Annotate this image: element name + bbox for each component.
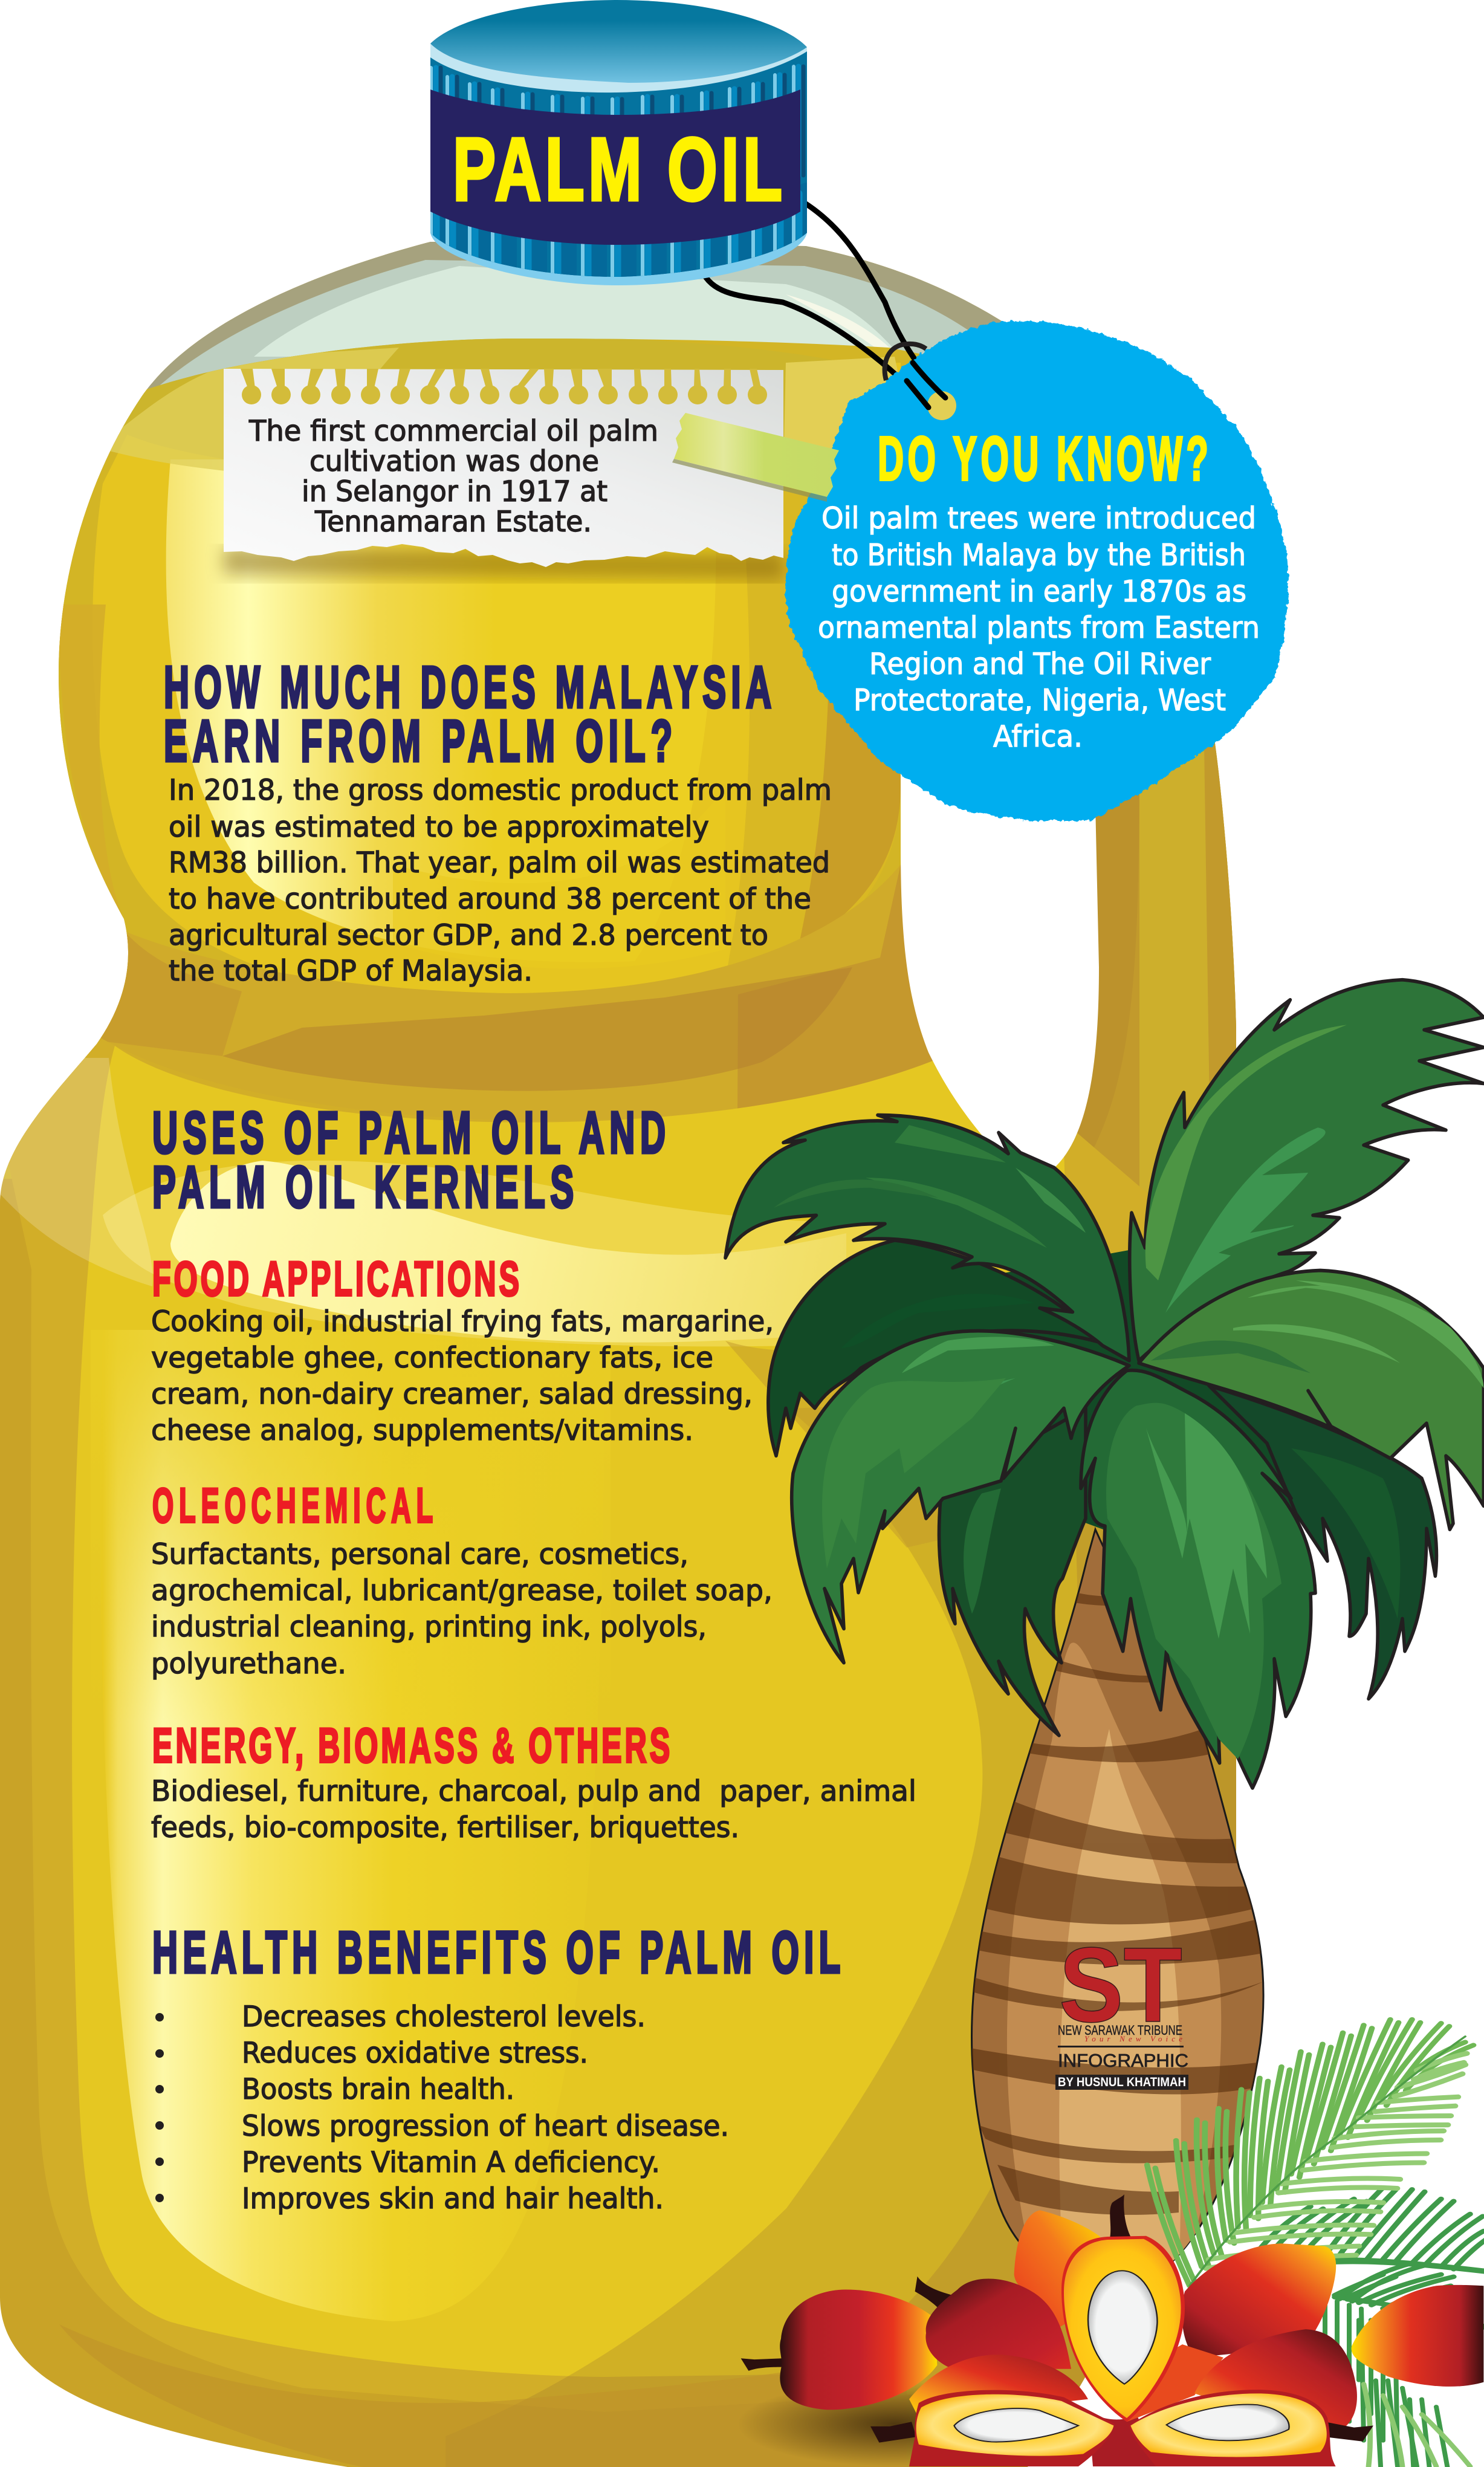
benefits list: Boosts brain health. <box>242 2073 514 2106</box>
earnings paragraph: In 2018, the gross domestic product from palm <box>169 774 832 807</box>
note text <box>248 415 658 539</box>
infographic label: INFOGRAPHIC <box>1058 2050 1188 2071</box>
string ends over hole <box>907 363 945 407</box>
bottle silhouette <box>0 242 1236 2467</box>
fern: lower leaflets <box>1206 2054 1466 2268</box>
frond: centre front <box>1081 1370 1315 1788</box>
frond highlight: back right <box>1291 1448 1400 1619</box>
strings to tag <box>702 203 945 407</box>
fruit: bottom left half <box>870 2390 1115 2466</box>
note line 1: The first commercial oil palm <box>248 415 658 448</box>
frond: back left dark <box>768 1240 1103 1456</box>
did you know tag <box>785 321 1288 821</box>
fern: main stem <box>1190 2037 1465 2286</box>
upper pale highlight <box>166 459 716 962</box>
byline box <box>1055 2075 1188 2090</box>
tagline: Your New Voice <box>1084 2034 1182 2043</box>
cap top <box>430 0 807 83</box>
earnings heading: HOW MUCH DOES MALAYSIA <box>164 655 771 720</box>
fruit: right lower <box>1194 2329 1357 2433</box>
tag heading: DO YOU KNOW? <box>878 424 1208 493</box>
fruit: left whole with stem <box>741 2290 937 2410</box>
benefits list: Improves skin and hair health. <box>242 2182 664 2216</box>
energy text: Biodiesel, furniture, charcoal, pulp and paper, animal <box>151 1775 916 1808</box>
ST letters: ST <box>1059 1926 1182 2044</box>
string loop <box>885 344 926 380</box>
frond: back right dark <box>1209 1386 1436 1699</box>
section: earnings <box>164 655 832 988</box>
fern: lower right light <box>1364 2384 1470 2466</box>
newspaper logo <box>1055 1926 1188 2090</box>
fern: lower right dark <box>1325 2301 1451 2467</box>
shoulder pale highlight <box>103 1161 967 1346</box>
palm fruit cluster <box>741 2194 1483 2466</box>
fruit: right large <box>1182 2243 1336 2358</box>
benefits list: Slows progression of heart disease. <box>242 2110 729 2143</box>
shoulder glass sheen <box>0 1058 153 1286</box>
food applications text: vegetable ghee, confectionary fats, ice <box>151 1341 713 1375</box>
frond: back lower left <box>939 1409 1086 1736</box>
palm crown <box>725 980 1483 1788</box>
oil upper fill <box>0 302 1269 1179</box>
bullets <box>155 2013 164 2202</box>
bottle <box>0 242 1269 2467</box>
left side stripes <box>59 605 124 919</box>
benefits list: Decreases cholesterol levels. <box>242 2000 646 2034</box>
fruit shadow <box>737 2382 1052 2466</box>
handle hole <box>901 695 1099 1185</box>
logo rule <box>1058 2046 1184 2047</box>
note line 4: Tennamaran Estate. <box>314 505 592 539</box>
uses heading: USES OF PALM OIL AND <box>152 1100 666 1165</box>
upper body main <box>92 363 901 998</box>
fruit: bottom centre red <box>1088 2411 1161 2466</box>
frond: right front <box>1139 1271 1483 1529</box>
lower vertical highlight <box>100 1330 604 2321</box>
oil surface lens <box>97 337 943 479</box>
paper sheet <box>224 369 783 567</box>
blue torn circle <box>785 321 1288 821</box>
oleochemical text <box>151 1538 773 1681</box>
uses heading: PALM OIL KERNELS <box>152 1155 574 1220</box>
section: uses <box>151 1100 916 1844</box>
waist shadow band <box>73 864 979 1209</box>
section: health benefits <box>152 1920 840 2216</box>
energy heading: ENERGY, BIOMASS & OTHERS <box>152 1719 670 1773</box>
energy text: feeds, bio-composite, fertiliser, briquettes. <box>151 1811 739 1844</box>
food applications text <box>151 1305 774 1447</box>
tag line 7: Africa. <box>993 719 1083 754</box>
frond highlights: centre <box>1106 1403 1281 1759</box>
fruit: second whole with stem <box>915 2277 1071 2369</box>
benefits list <box>242 2000 729 2216</box>
bottle cap <box>430 0 807 285</box>
frond: upper left <box>725 1115 1129 1361</box>
title: PALM OIL <box>453 120 782 219</box>
fruit: bottom right half <box>1129 2390 1373 2466</box>
note paper <box>224 369 783 567</box>
binding holes <box>241 369 767 404</box>
health heading: HEALTH BENEFITS OF PALM OIL <box>152 1920 840 1985</box>
frond: left front <box>792 1331 1129 1663</box>
frond highlights: right <box>1151 1280 1483 1388</box>
byline: BY HUSNUL KHATIMAH <box>1058 2075 1186 2089</box>
glass neck and oil body layers <box>0 242 1269 2467</box>
lower body base <box>0 1028 1236 2412</box>
fruit: centre right orange <box>1112 2344 1223 2422</box>
food applications heading: FOOD APPLICATIONS <box>152 1252 519 1306</box>
tag line 5: Region and The Oil River <box>869 647 1211 681</box>
tag line 6: Protectorate, Nigeria, West <box>854 683 1226 718</box>
oleochemical text: Surfactants, personal care, cosmetics, <box>151 1538 689 1571</box>
uses heading <box>152 1100 666 1220</box>
cap ribs <box>431 66 807 284</box>
cap body <box>430 44 807 285</box>
earnings paragraph: oil was estimated to be approximately <box>169 811 709 844</box>
tag line 2: to British Malaya by the British <box>832 538 1246 572</box>
handle bands <box>1064 605 1269 1330</box>
palm trunk <box>967 1529 1266 2297</box>
waist left shade <box>91 931 242 1056</box>
earnings paragraph <box>169 774 832 988</box>
earnings paragraph: the total GDP of Malaysia. <box>169 955 533 988</box>
tag body <box>818 501 1260 754</box>
waist dark lens <box>222 967 852 1091</box>
note paper shadow <box>224 547 786 580</box>
oleochemical text: polyurethane. <box>151 1647 346 1681</box>
fern: main stem leaflets <box>1147 2020 1474 2289</box>
frond: upper right <box>1130 980 1483 1361</box>
fruit: centre half <box>1061 2194 1185 2422</box>
waist right shade <box>737 864 961 1112</box>
food applications text: cream, non-dairy creamer, salad dressing, <box>151 1378 753 1411</box>
note line 2: cultivation was done <box>309 445 599 478</box>
oleochemical heading: OLEOCHEMICAL <box>152 1478 433 1532</box>
trunk shading and bands <box>967 1591 1266 2297</box>
food applications text: cheese analog, supplements/vitamins. <box>151 1414 693 1447</box>
benefits list: Reduces oxidative stress. <box>242 2037 588 2070</box>
frond highlights: left <box>822 1337 1054 1569</box>
earnings heading <box>164 655 771 774</box>
tag line 3: government in early 1870s as <box>832 574 1246 609</box>
energy text <box>151 1775 916 1844</box>
fern fronds <box>1147 2020 1484 2467</box>
tag line 4: ornamental plants from Eastern <box>818 611 1260 645</box>
earnings paragraph: agricultural sector GDP, and 2.8 percent to <box>169 919 768 952</box>
fruit: far right <box>1352 2285 1483 2387</box>
oleochemical text: agrochemical, lubricant/grease, toilet soap, <box>151 1574 773 1607</box>
tape strip <box>674 413 839 497</box>
highlight upward fade <box>91 1330 611 1729</box>
tape shadow <box>672 459 827 502</box>
oleochemical text: industrial cleaning, printing ink, polyols, <box>151 1610 707 1644</box>
trunk base <box>972 1529 1263 2288</box>
tag hole <box>927 391 956 420</box>
food applications text: Cooking oil, industrial frying fats, margarine, <box>151 1305 774 1338</box>
earnings paragraph: RM38 billion. That year, palm oil was estimated <box>169 846 830 880</box>
earnings heading: EARN FROM PALM OIL? <box>164 708 672 774</box>
navy band <box>430 89 800 245</box>
frond highlights: upper <box>774 1025 1347 1348</box>
note line 3: in Selangor in 1917 at <box>302 475 608 508</box>
fern: right dark <box>1209 2188 1484 2330</box>
earnings paragraph: to have contributed around 38 percent of the <box>169 883 811 916</box>
frond highlight: back lower left <box>964 1488 1001 1613</box>
cap top rim <box>430 44 807 92</box>
fruit: left lower back <box>909 2355 1088 2418</box>
tape <box>672 413 839 502</box>
publication name: NEW SARAWAK TRIBUNE <box>1058 2023 1182 2038</box>
tag line 1: Oil palm trees were introduced <box>821 501 1256 536</box>
fruit: back left petal <box>1014 2210 1100 2327</box>
benefits list: Prevents Vitamin A deficiency. <box>242 2146 660 2179</box>
crown dark core <box>977 1248 1306 1569</box>
bottom shadow bands <box>59 2324 907 2467</box>
right lower shade <box>446 1390 1269 2467</box>
